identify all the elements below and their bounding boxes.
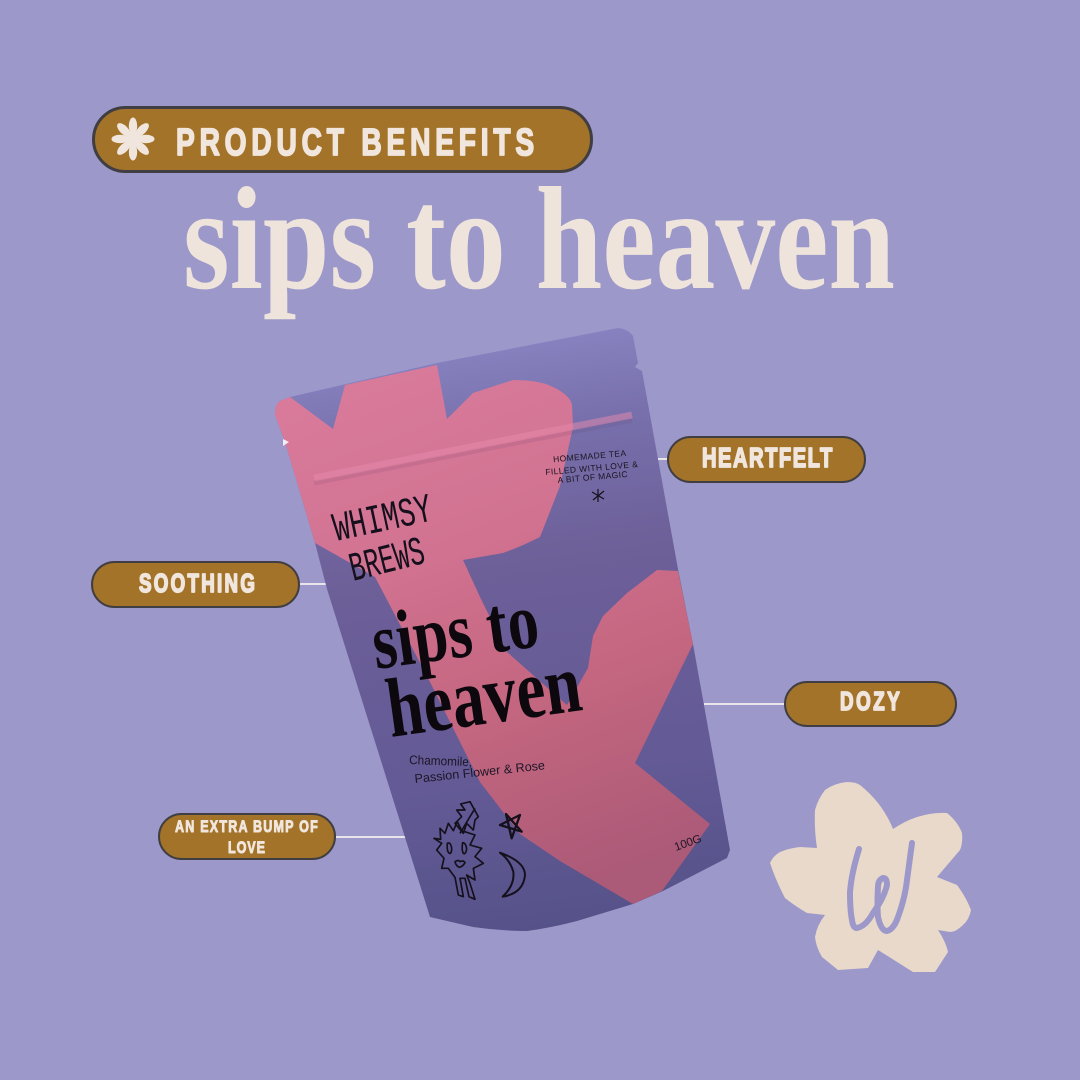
tear notch — [283, 439, 289, 446]
flavour text: Chamomile, — [409, 753, 472, 769]
pouch body — [275, 328, 730, 931]
pouch title: heaven — [381, 637, 587, 756]
label: an extra bump of love: AN EXTRA BUMP OF — [175, 817, 318, 837]
zip seal — [314, 415, 632, 483]
logo flower badge — [770, 782, 971, 972]
icon: spiky sun creature — [434, 822, 483, 899]
tagline: A BIT OF MAGIC — [557, 469, 628, 485]
icon: flower — [112, 118, 154, 160]
brand name — [329, 488, 437, 594]
label: heartfelt — [668, 437, 865, 482]
tagline — [545, 448, 639, 485]
icon: star — [500, 814, 522, 838]
label: an extra bump of love: LOVE — [228, 838, 265, 858]
creature face — [447, 843, 467, 867]
icon: leaf — [455, 802, 478, 833]
label: dozy: DOZY — [840, 686, 900, 716]
header pill: product benefits — [94, 108, 592, 172]
icon: small star — [592, 489, 604, 502]
label: an extra bump of love — [159, 814, 335, 859]
icon: crescent moon — [500, 853, 525, 897]
pouch title: sips to — [366, 576, 544, 687]
product pouch — [275, 328, 730, 931]
W monogram — [850, 843, 912, 931]
title: sips to heaven — [183, 157, 895, 320]
connector lines — [300, 459, 785, 837]
label: soothing — [92, 562, 299, 607]
label: dozy — [785, 682, 956, 726]
label: heartfelt: HEARTFELT — [702, 443, 832, 474]
tagline: FILLED WITH LOVE & — [545, 459, 639, 477]
icons: creature, star, moon — [434, 802, 525, 899]
brand name: WHIMSY — [329, 488, 437, 554]
label: soothing: SOOTHING — [139, 568, 255, 598]
pink shape: top and sweeping band — [275, 365, 710, 904]
brand name: BREWS — [345, 531, 430, 594]
flavour text: Passion Flower & Rose — [414, 758, 546, 786]
header text: PRODUCT BENEFITS — [176, 122, 534, 164]
weight: 100G — [673, 833, 704, 854]
pouch title — [366, 576, 587, 756]
tagline: HOMEMADE TEA — [553, 448, 627, 464]
